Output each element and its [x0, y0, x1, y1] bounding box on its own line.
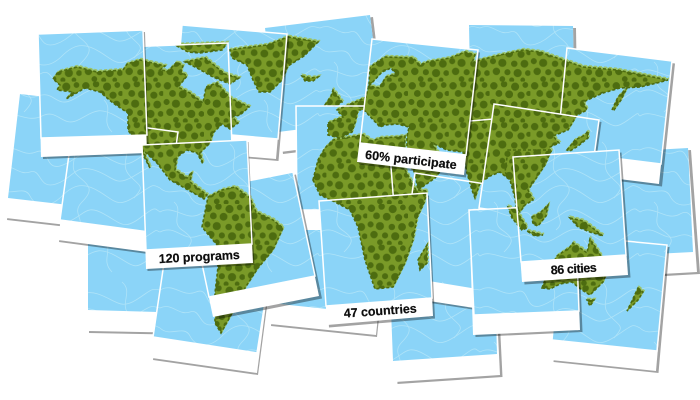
photo: Brazil [202, 173, 322, 320]
photo: lower left ocean [88, 244, 162, 334]
photo: north Atlantic [265, 15, 376, 154]
photo: Middle East [390, 118, 492, 195]
photo: northern Asia [469, 25, 576, 120]
caption: 47 countries: 47 countries [343, 301, 417, 321]
photo: western United States [59, 127, 179, 254]
photo: Greenland [181, 26, 290, 161]
photo: eastern Siberia [560, 47, 675, 186]
photo: Europe with caption [357, 38, 480, 178]
photo: Indian Ocean south [391, 302, 502, 384]
photo: Central America with caption [142, 140, 254, 271]
photo: southern Australia [468, 207, 582, 337]
photo: Arabian Sea [411, 172, 482, 310]
caption: 86 cities: 86 cities [550, 261, 597, 277]
photo: China and Japan [478, 103, 602, 209]
photo: north-west Africa [295, 105, 392, 230]
caption: 120 programs: 120 programs [158, 248, 240, 266]
photo: Southeast Asia with caption [512, 149, 630, 284]
caption: 60% participate: 60% participate [364, 148, 457, 172]
photo: far left ocean [7, 94, 68, 226]
photo: Alaska and Canada [38, 30, 149, 159]
photo: southern tip of South America [152, 266, 267, 375]
photo: central North America [144, 42, 232, 143]
photo: New Zealand [552, 240, 670, 373]
photo: far right ocean [622, 148, 700, 276]
photo: south Atlantic [271, 230, 379, 337]
photo: Africa with caption [318, 192, 435, 328]
